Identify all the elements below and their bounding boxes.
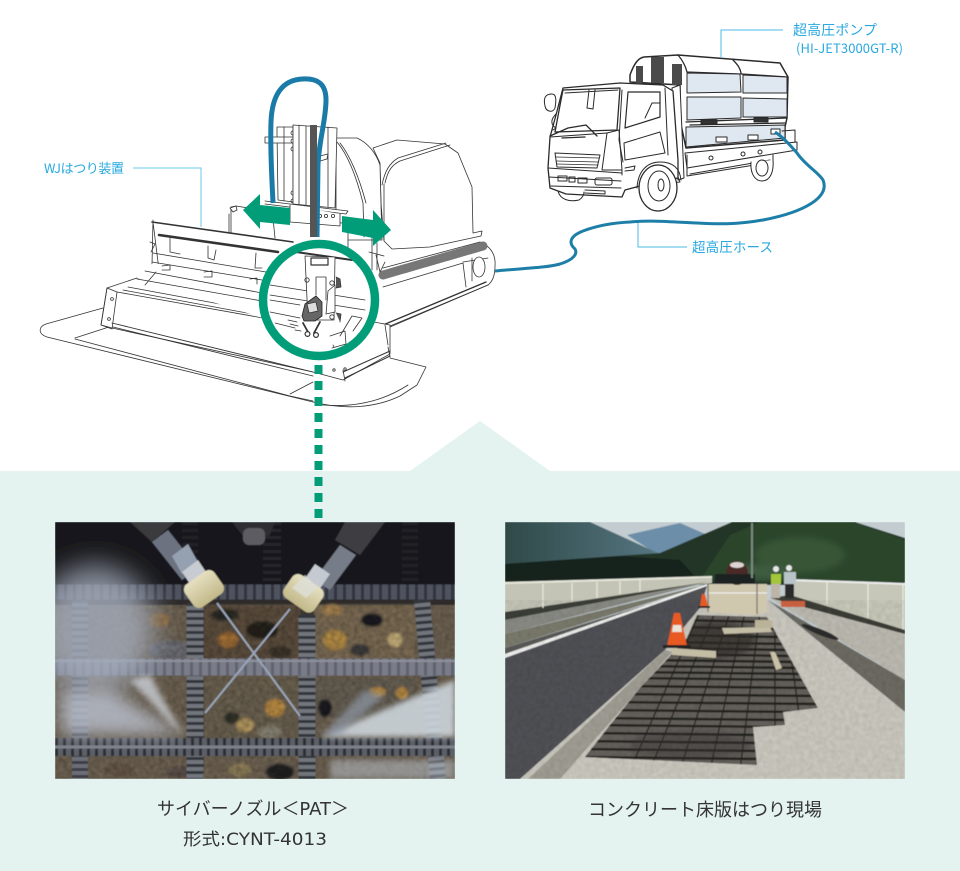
water jets xyxy=(205,603,300,716)
green move arrow right xyxy=(342,210,391,246)
right side xyxy=(770,580,905,680)
callout: pump: (HI-JET3000GT-R) xyxy=(796,38,903,57)
background panel xyxy=(0,421,960,871)
rear wheel xyxy=(751,160,773,181)
operator cover right xyxy=(373,140,482,249)
callout: WJ device: WJはつり装置 xyxy=(44,158,124,177)
front housing xyxy=(101,278,390,381)
callout: hose: 超高圧ホース xyxy=(692,236,773,256)
plate and paddles xyxy=(40,308,426,407)
callout: pump xyxy=(721,20,903,58)
callout: pump: 超高圧ポンプ xyxy=(793,20,877,40)
photo: cyber nozzle xyxy=(35,522,455,780)
caption: nozzle name: サイバーノズル＜PAT＞ xyxy=(157,799,349,820)
rails xyxy=(137,220,293,318)
traffic cones xyxy=(663,594,710,648)
truck bed xyxy=(655,85,797,184)
green move arrow left xyxy=(243,194,290,229)
caption: site: コンクリート床版はつり現場 xyxy=(588,800,822,821)
nozzle arms xyxy=(130,522,385,590)
left railing xyxy=(505,577,712,608)
high-pressure hose xyxy=(495,132,824,271)
operator cover left xyxy=(336,138,382,240)
caption: nozzle model: 形式:CYNT-4013 xyxy=(183,830,327,850)
machine box xyxy=(708,523,767,615)
concrete aggregate xyxy=(105,604,415,780)
green ring xyxy=(263,244,375,356)
dotted connector xyxy=(314,365,322,519)
truck cab xyxy=(544,83,678,201)
road left xyxy=(505,578,712,779)
mountains xyxy=(505,522,905,585)
concrete surface xyxy=(520,600,905,779)
exposed rebar grid xyxy=(575,610,820,770)
vertical column xyxy=(265,125,348,226)
photo: concrete deck site xyxy=(505,522,905,779)
nozzle carriage xyxy=(270,252,365,348)
illustration: pump truck xyxy=(544,55,797,211)
horizontal rebars xyxy=(55,592,455,747)
left side bracket xyxy=(265,127,295,203)
detail circle xyxy=(263,244,375,356)
pump enclosure xyxy=(630,55,788,148)
high-pressure hose loop xyxy=(271,79,326,237)
illustration: WJ hatsuri machine xyxy=(40,79,495,407)
callout: hose xyxy=(638,223,773,256)
rear frame behind column xyxy=(229,206,385,272)
workers xyxy=(771,565,840,642)
front wheel xyxy=(637,162,681,211)
vertical rebars xyxy=(80,522,438,779)
timber pieces xyxy=(672,620,782,670)
water spray xyxy=(35,565,455,779)
nozzle caps xyxy=(181,567,327,615)
dark column bar xyxy=(310,125,317,237)
callout: WJ device xyxy=(44,158,201,227)
track crawler xyxy=(383,242,495,330)
